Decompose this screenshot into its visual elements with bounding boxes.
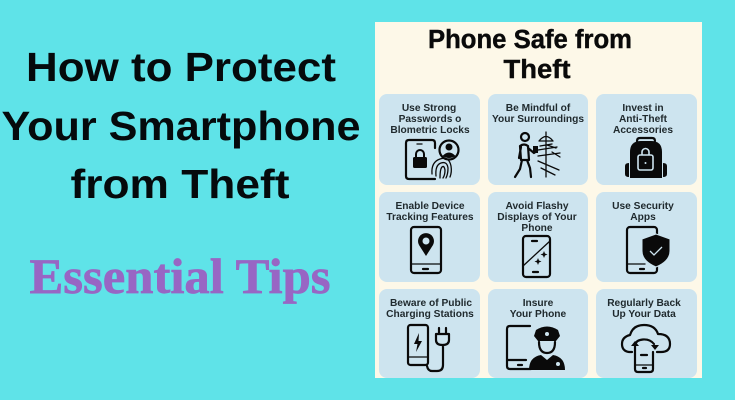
main title: How to Protect <box>26 44 336 90</box>
card: back up data: Up Your Data <box>612 309 676 320</box>
card: anti-theft accessories: Accessories <box>613 125 673 136</box>
icon: phone and police officer <box>507 326 565 370</box>
icon: power bank and plug <box>408 325 449 371</box>
card: avoid flashy displays: Avoid Flashy <box>505 201 569 212</box>
icon: cloud and phone sync <box>622 325 670 372</box>
subtitle: essential tips: Essential Tips <box>30 248 330 304</box>
card: anti-theft accessories <box>596 94 697 185</box>
card: device tracking: Enable Device <box>395 201 465 212</box>
card: public charging stations: Charging Stations <box>386 309 474 320</box>
card: device tracking: Tracking Features <box>386 212 474 223</box>
card: avoid flashy displays: Phone <box>521 223 553 234</box>
icon: phone with location pin <box>411 227 441 273</box>
card: insure your phone <box>488 289 588 378</box>
main title <box>2 44 360 207</box>
card: strong passwords <box>379 94 480 185</box>
card: anti-theft accessories: Invest in <box>622 103 664 114</box>
panel heading <box>428 26 632 84</box>
panel heading: Phone Safe from <box>428 26 632 54</box>
card: device tracking <box>379 192 480 282</box>
card: insure your phone: Your Phone <box>510 309 567 320</box>
icon: backpack <box>625 138 667 178</box>
panel: phone safe from theft <box>375 22 702 378</box>
main title: Your Smartphone <box>2 103 360 149</box>
icon: phone with shield <box>627 227 670 273</box>
card: strong passwords: Passwords o <box>399 114 461 125</box>
card: avoid flashy displays <box>488 192 588 282</box>
card: back up data: Regularly Back <box>607 298 681 309</box>
card: anti-theft accessories: Anti-Theft <box>619 114 668 125</box>
card: back up data <box>596 289 697 378</box>
icon: phone with sparkles <box>523 236 550 277</box>
card: mindful of surroundings: Be Mindful of <box>506 103 571 114</box>
card: avoid flashy displays: Displays of Your <box>497 212 577 223</box>
card: strong passwords: Use Strong <box>402 103 456 114</box>
card: security apps: Use Security <box>612 201 674 212</box>
card: security apps <box>596 192 697 282</box>
panel heading: Theft <box>504 56 571 84</box>
card: public charging stations <box>379 289 480 378</box>
card: mindful of surroundings: Your Surroundings <box>492 114 584 125</box>
card: insure your phone: Insure <box>523 298 554 309</box>
card: strong passwords: Blometric Locks <box>390 125 470 136</box>
icon: person walking by pole <box>515 132 560 177</box>
icon: phone lock and fingerprint <box>406 140 458 179</box>
card: public charging stations: Beware of Public <box>390 298 472 309</box>
card: security apps: Apps <box>630 212 656 223</box>
main title: from Theft <box>70 161 290 207</box>
card: mindful of surroundings <box>488 94 588 185</box>
